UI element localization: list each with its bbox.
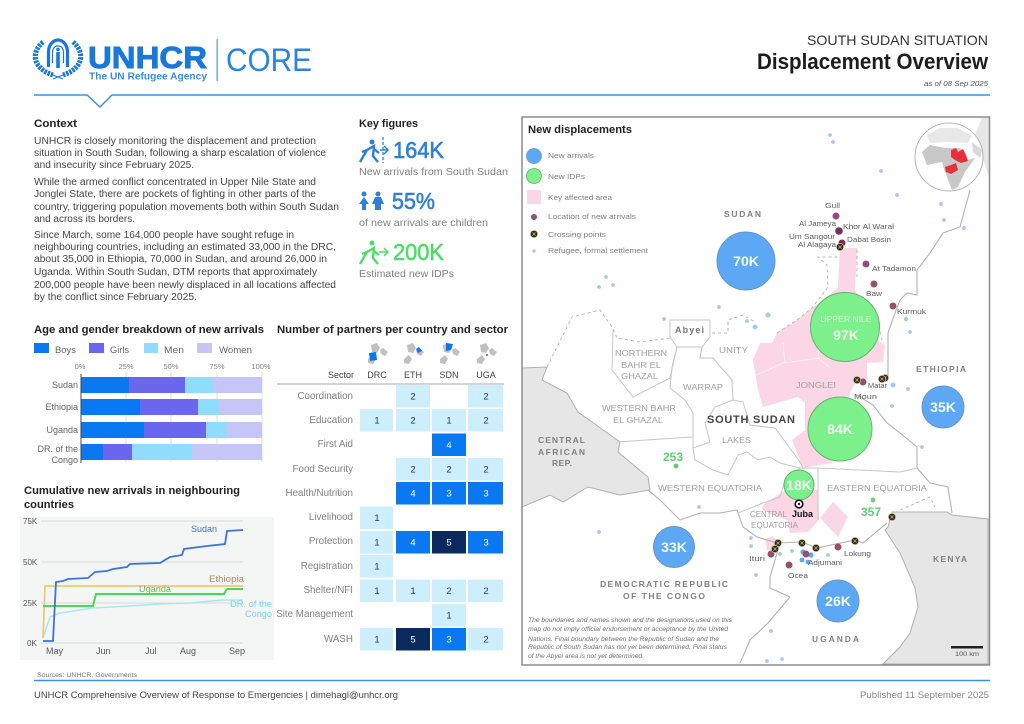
- heatmap values: 2: [410, 392, 416, 402]
- bubble: Upper Nile 97K: 97K: [833, 327, 859, 343]
- heatmap values: 2: [483, 586, 489, 597]
- panel: new displacements map: [522, 117, 990, 665]
- footer: [34, 672, 990, 701]
- series labels: Sudan: [191, 524, 217, 534]
- neighbouring country: Central African Republic: [522, 367, 650, 507]
- heatmap cells: [360, 385, 503, 650]
- context body text: While the armed conflict concentrated in Upper Nile State and: [34, 177, 316, 188]
- sector labels: Health/Nutrition: [285, 488, 353, 499]
- bubble: Ethiopia 35K: [922, 386, 964, 428]
- tagline: The UN Refugee Agency: [89, 70, 207, 82]
- heatmap values: 3: [446, 634, 452, 646]
- place labels: Lokung: [844, 549, 871, 558]
- sector labels: Protection: [309, 536, 353, 547]
- bubble: Upper Nile 97K: UPPER NILE: [820, 314, 872, 324]
- country labels: Ethiopia: [45, 402, 78, 412]
- bubble: Upper Nile 97K: [810, 292, 880, 362]
- heatmap values: 3: [446, 488, 452, 500]
- country labels: [538, 209, 968, 644]
- x axis labels: Jul: [145, 646, 157, 656]
- refugee settlement dots: [597, 133, 966, 663]
- place labels: Ocea: [788, 571, 809, 580]
- scale bar: 100 km: [955, 651, 979, 658]
- state labels: LAKES: [722, 435, 751, 445]
- percent axis: 75%: [209, 362, 225, 371]
- heatmap values: 2: [446, 586, 452, 597]
- heatmap values: 2: [483, 392, 489, 402]
- bubble: Sudan 70K: [717, 232, 775, 290]
- date: as of 08 Sep 2025: [924, 79, 989, 88]
- heatmap values: 1: [410, 586, 416, 597]
- bubble: Jonglei 84K: 84K: [827, 421, 853, 437]
- x axis labels: Jun: [96, 646, 111, 656]
- context body text: Since March, some 164,000 people have sought refuge in: [34, 230, 294, 241]
- heatmap values: 2: [483, 416, 489, 426]
- heatmap values: 5: [410, 634, 416, 646]
- bubble: Central Equatoria 18K: [784, 470, 814, 500]
- map legend: Refugee, formal settlement: [548, 246, 649, 255]
- place labels: Al Alagaya: [798, 240, 837, 249]
- state labels: CENTRAL: [750, 509, 787, 519]
- place labels: Matar: [868, 381, 887, 390]
- capital marker: Juba: Juba: [792, 509, 814, 520]
- sector labels: First Aid: [318, 439, 353, 450]
- legend: [34, 343, 252, 355]
- place labels: At Tadamon: [872, 264, 916, 273]
- country labels: DR. of the: [37, 444, 78, 454]
- bubble: Sudan 70K: 70K: [733, 253, 759, 269]
- y axis labels: 75K: [23, 517, 38, 526]
- place labels: Adjumani: [808, 558, 842, 567]
- disclaimer: Nations. Final boundary between the Republic of Sudan and the: [528, 636, 719, 643]
- sources: Sources: UNHCR, Governments: [37, 672, 138, 679]
- panel: partners table: [276, 324, 509, 650]
- series labels: [139, 524, 272, 619]
- disclaimer: of the Abyei area is not yet determined.: [528, 653, 644, 660]
- bubble: Uganda 26K: 26K: [825, 593, 851, 609]
- state labels: [602, 345, 927, 530]
- table heading: Number of partners per country and sector: [277, 324, 509, 336]
- sector labels: Livelihood: [309, 512, 353, 523]
- bubble: Uganda 26K: [817, 580, 859, 622]
- country labels: KENYA: [933, 554, 968, 564]
- state labels: EASTERN EQUATORIA: [827, 483, 927, 493]
- country labels: SUDAN: [724, 209, 762, 219]
- state labels: GHAZAL: [621, 371, 658, 381]
- state labels: WARRAP: [683, 382, 723, 392]
- place labels: Gull: [825, 201, 840, 210]
- caption: new IDPs: Estimated new IDPs: [359, 269, 454, 280]
- sector labels: [276, 391, 353, 645]
- context body text: and across its borders.: [34, 214, 135, 225]
- context body text: about 35,000 in Ethiopia, 70,000 in Sudan, and around 26,000 in: [34, 254, 327, 265]
- heatmap values: 1: [374, 634, 380, 646]
- icon: new arrivals runner crossing border: [360, 137, 388, 163]
- line: Sudan: [43, 530, 243, 641]
- panel: cumulative arrivals line chart: [20, 485, 274, 660]
- country labels: Abyei: [675, 325, 704, 335]
- sector labels: Registration: [301, 561, 353, 572]
- heatmap values: 3: [483, 488, 489, 500]
- sector labels: Coordination: [297, 391, 353, 402]
- state labels: NORTHERN: [615, 348, 667, 358]
- heatmap values: 2: [483, 634, 489, 646]
- y axis labels: 25K: [23, 599, 38, 608]
- legend: Women: [219, 345, 252, 355]
- country labels: ETHIOPIA: [916, 364, 967, 374]
- percent axis: 50%: [163, 362, 179, 371]
- map legend: New IDPs: [548, 172, 585, 181]
- CORE wordmark: CORE: [226, 42, 312, 78]
- country labels: OF THE CONGO: [623, 591, 706, 601]
- chart heading: Cumulative new arrivals in neighbouring: [24, 485, 240, 497]
- heatmap values: [374, 392, 489, 646]
- map legend: Location of new arrivals: [548, 212, 636, 221]
- country labels: Uganda: [46, 425, 78, 435]
- state labels: EQUATORIA: [751, 520, 798, 530]
- sector labels: Site Management: [276, 609, 353, 620]
- heatmap values: 1: [374, 538, 380, 548]
- x axis labels: May: [46, 646, 64, 656]
- neighbouring country: Kenya: [883, 512, 988, 664]
- context heading: Context: [34, 118, 77, 130]
- series labels: Congo: [245, 609, 272, 619]
- place labels: Kurmuk: [897, 307, 926, 316]
- scale bar: [951, 646, 983, 658]
- place labels: Um Sangour: [789, 232, 836, 241]
- country labels: SOUTH SUDAN: [707, 414, 795, 426]
- figure: 55%: 55%: [392, 188, 435, 214]
- line: Ethiopia: [43, 586, 243, 638]
- context body text: UNHCR is closely monitoring the displacement and protection: [34, 136, 316, 147]
- percent axis: 0%: [75, 362, 86, 371]
- disclaimer: [528, 617, 733, 660]
- heatmap values: 2: [483, 464, 489, 476]
- map legend: Crossing points: [548, 230, 606, 239]
- small IDP figures: 253: [663, 450, 683, 464]
- UNHCR wordmark: UNHCR: [88, 40, 207, 75]
- figure: 200K: 200K: [393, 239, 445, 265]
- state labels: WESTERN BAHR: [602, 403, 676, 413]
- context body text: and insecurity since February 2025.: [34, 160, 194, 171]
- disputed boundaries (dashed): [547, 250, 935, 510]
- heatmap values: 1: [374, 562, 380, 572]
- place labels: [749, 201, 926, 580]
- bubble: Ethiopia 35K: 35K: [930, 399, 956, 415]
- context body text: neighbouring countries, including an estimated 33,000 in the DRC,: [34, 242, 336, 253]
- country labels: UGANDA: [812, 634, 860, 644]
- footer left text: UNHCR Comprehensive Overview of Response to Emergencies | dimehagl@unhcr.org: [34, 690, 398, 701]
- figure: 164K: 164K: [393, 137, 445, 163]
- icon: children: [359, 192, 384, 210]
- country labels: REP.: [552, 458, 573, 468]
- percent axis: 25%: [118, 362, 134, 371]
- state boundaries: [612, 320, 917, 520]
- percent axis: 100%: [251, 362, 271, 371]
- context body text: country, triggering population movements both within South Sudan: [34, 202, 339, 213]
- crossing points: [771, 243, 896, 553]
- state labels: EL GHAZAL: [613, 415, 663, 425]
- neighbouring land: north-east corner: [975, 118, 989, 177]
- context body text: 200,000 people have been newly displaced in all locations affected: [34, 280, 336, 291]
- icon row: country locator maps: [368, 343, 497, 364]
- country labels: CENTRAL: [538, 435, 586, 445]
- place labels: Ituri: [749, 554, 765, 563]
- heatmap values: 2: [410, 464, 416, 476]
- x axis labels: [46, 646, 245, 656]
- map heading: New displacements: [528, 124, 632, 136]
- location of new arrivals dots: [768, 212, 896, 568]
- state labels: UNITY: [719, 345, 748, 355]
- key affected areas: [753, 248, 885, 550]
- place labels: Baw: [866, 289, 883, 298]
- x axis labels: Aug: [180, 646, 196, 656]
- country labels: Sudan: [52, 380, 78, 390]
- bubble: DRC 33K: [654, 526, 694, 568]
- legend: Men: [164, 345, 184, 355]
- inset globe: [915, 123, 983, 191]
- country labels: [37, 380, 78, 465]
- map legend: New arrivals: [548, 151, 594, 160]
- bubble: Central Equatoria 18K: 18K: [786, 477, 812, 493]
- disclaimer: Republic of South Sudan has not yet been determined. Final status: [528, 644, 728, 651]
- column headers: SDN: [439, 370, 459, 380]
- state labels: WESTERN EQUATORIA: [658, 483, 762, 493]
- x axis labels: Sep: [229, 646, 245, 656]
- panel: context: [34, 118, 339, 303]
- percent axis: [75, 362, 271, 371]
- column headers: ETH: [404, 370, 422, 380]
- context body text: [34, 136, 339, 303]
- heatmap values: 1: [374, 586, 380, 597]
- place labels: Moun: [854, 392, 877, 401]
- map legend: Key affected area: [548, 193, 613, 202]
- publication date: Published 11 September 2025: [860, 690, 989, 701]
- heatmap values: 1: [446, 416, 452, 426]
- icon: UNHCR emblem: [35, 40, 81, 79]
- heatmap values: 3: [483, 538, 489, 548]
- column headers: Sector: [328, 370, 354, 380]
- place labels: Al Jameya: [799, 219, 837, 228]
- disclaimer: map do not imply official endorsement or acceptance by the United: [528, 626, 728, 633]
- heatmap values: 1: [374, 513, 380, 524]
- country labels: DEMOCRATIC REPUBLIC: [600, 579, 729, 589]
- line: Uganda: [43, 589, 243, 606]
- sector labels: WASH: [324, 634, 353, 645]
- logo: UNHCR The UN Refugee Agency: [35, 39, 312, 82]
- place labels: Dabat Bosin: [847, 235, 891, 244]
- caption: children: of new arrivals are children: [359, 218, 488, 229]
- column headers: [328, 370, 496, 380]
- country labels: Congo: [51, 455, 78, 465]
- small IDP figures: [663, 450, 881, 519]
- heatmap values: 1: [374, 416, 380, 426]
- stacked bars: [81, 377, 262, 460]
- heatmap values: 1: [446, 610, 452, 622]
- column headers: UGA: [476, 370, 496, 380]
- y axis labels: 0K: [27, 639, 37, 648]
- bubble: DRC 33K: 33K: [661, 539, 687, 555]
- icon: IDP runner: [360, 240, 388, 264]
- heatmap values: 2: [446, 464, 452, 476]
- chart heading: Age and gender breakdown of new arrivals: [34, 324, 264, 336]
- legend: Boys: [55, 345, 77, 355]
- heatmap values: 2: [410, 416, 416, 426]
- main title: Displacement Overview: [757, 49, 989, 74]
- heatmap values: 5: [446, 538, 452, 548]
- legend: Girls: [110, 345, 130, 355]
- context body text: by the conflict since February 2025.: [34, 292, 197, 303]
- line: DR of the Congo: [43, 600, 243, 638]
- panel: cumulative arrivals line chart: countries: [24, 499, 74, 511]
- series labels: Ethiopia: [209, 574, 244, 584]
- bubble: Jonglei 84K: [808, 397, 872, 461]
- y axis labels: 50K: [23, 558, 38, 567]
- capital marker: Juba: [792, 500, 814, 520]
- context body text: situation in South Sudan, following a sharp escalation of violence: [34, 148, 326, 159]
- series labels: Uganda: [139, 584, 171, 594]
- map frame: [522, 117, 990, 665]
- state labels: BAHR EL: [621, 360, 661, 370]
- place labels: Khor Al Waral: [843, 222, 894, 231]
- international borders: [648, 190, 970, 663]
- sector labels: Shelter/NFI: [303, 585, 353, 596]
- disclaimer: The boundaries and names shown and the designations used on this: [528, 617, 733, 624]
- caption: new arrivals: New arrivals from South Sudan: [359, 167, 508, 178]
- state labels: JONGLEI: [796, 380, 836, 390]
- heatmap values: 4: [410, 488, 416, 500]
- y axis labels: [23, 517, 38, 648]
- sector labels: Food Security: [293, 464, 353, 475]
- key figures heading: Key figures: [359, 118, 418, 130]
- context body text: Jonglei State, there are pockets of fighting in other parts of the: [34, 189, 316, 200]
- panel: key figures: [359, 118, 508, 280]
- heatmap values: 4: [410, 538, 416, 548]
- map legend: [526, 148, 649, 255]
- sector labels: Education: [309, 415, 353, 426]
- panel: age and gender chart: [34, 324, 271, 465]
- heatmap values: 4: [446, 440, 452, 451]
- series labels: DR. of the: [230, 599, 272, 609]
- title block: [757, 32, 989, 88]
- column headers: DRC: [367, 370, 387, 380]
- situation name: SOUTH SUDAN SITUATION: [807, 32, 988, 48]
- context body text: Uganda. Within South Sudan, DTM reports that approximately: [34, 267, 317, 278]
- country labels: AFRICAN: [538, 447, 586, 457]
- small IDP figures: 357: [861, 505, 881, 519]
